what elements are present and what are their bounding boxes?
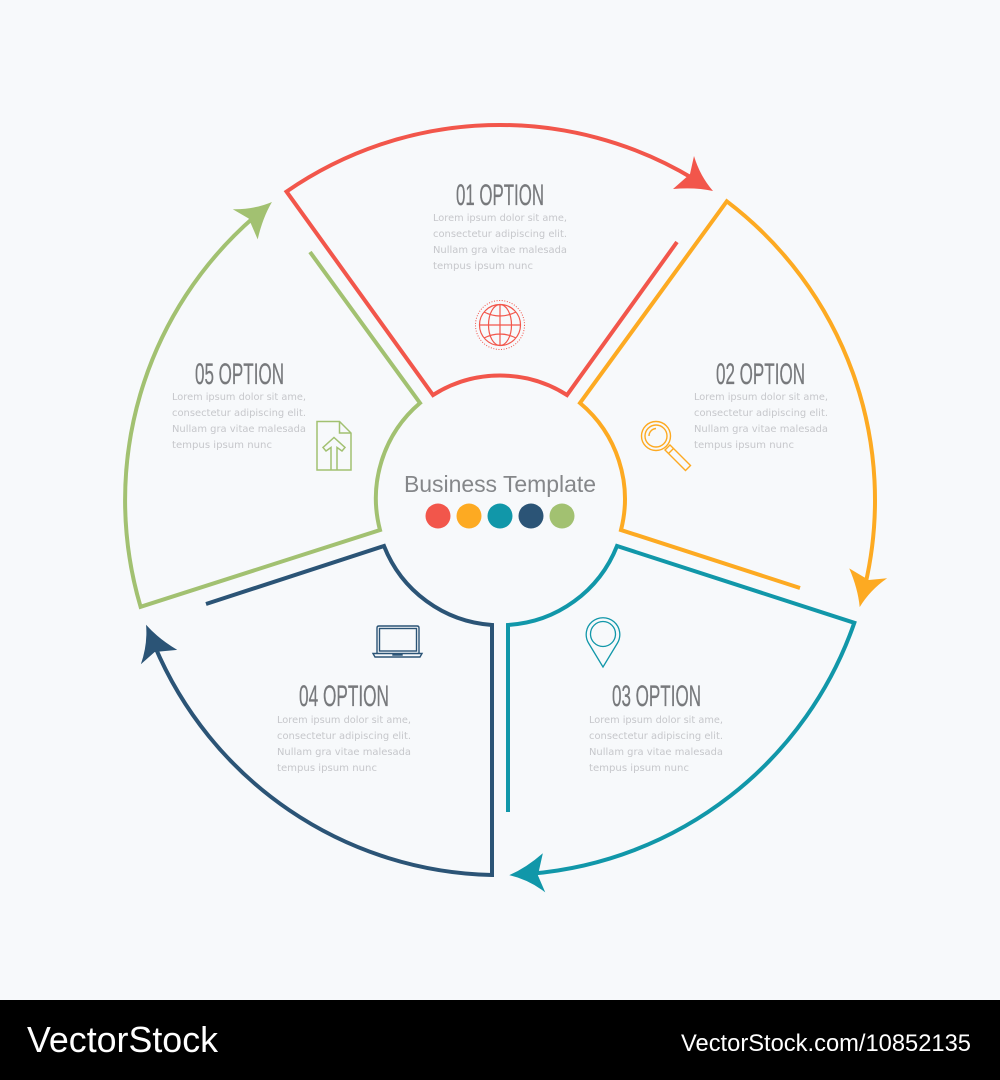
text block: 03 option — [589, 680, 723, 774]
footer bar: VectorStock — [27, 1019, 219, 1060]
panel: segment 01 outline red — [286, 125, 713, 395]
text block: 02 option: 02 OPTION — [716, 358, 805, 391]
text block: 03 option: 03 OPTION — [612, 680, 701, 713]
arrow: navy — [125, 625, 178, 677]
text block: 01 option: Nullam gra vitae malesada — [433, 245, 567, 256]
text block: 04 option: tempus ipsum nunc — [277, 763, 377, 774]
text block: 03 option: tempus ipsum nunc — [589, 763, 689, 774]
arrow: red — [673, 156, 713, 191]
text block: 05 option: Nullam gra vitae malesada — [172, 424, 306, 435]
icon: magnifier — [642, 422, 690, 470]
text block: 03 option: Nullam gra vitae malesada — [589, 747, 723, 758]
panel: segment 05 outline green — [125, 191, 420, 607]
text block: 01 option: tempus ipsum nunc — [433, 261, 533, 272]
text block: 05 option: tempus ipsum nunc — [172, 440, 272, 451]
text block: 05 option: Lorem ipsum dolor sit ame, — [172, 392, 306, 403]
panel: segment 04 outline navy — [125, 546, 492, 875]
color dots legend — [426, 504, 574, 528]
text block: 01 option: 01 OPTION — [456, 179, 544, 212]
text block: 04 option: 04 OPTION — [299, 680, 389, 713]
text block: 02 option: Lorem ipsum dolor sit ame, — [694, 392, 828, 403]
text block: 04 option — [277, 680, 411, 774]
text block: 01 option: consectetur adipiscing elit. — [433, 229, 567, 240]
text block: 03 option: Lorem ipsum dolor sit ame, — [589, 715, 723, 726]
text block: 04 option: Nullam gra vitae malesada — [277, 747, 411, 758]
text block: 03 option: consectetur adipiscing elit. — [589, 731, 723, 742]
text block: 05 option: 05 OPTION — [195, 358, 284, 391]
footer bar — [0, 1000, 1000, 1080]
footer bar: VectorStock.com/10852135 — [681, 1030, 971, 1057]
text block: 04 option: Lorem ipsum dolor sit ame, — [277, 715, 411, 726]
arrow: orange — [847, 558, 893, 607]
center title: Business Template — [404, 471, 596, 497]
icon: laptop — [373, 626, 422, 657]
text block: 05 option — [172, 358, 306, 451]
panel: segment 02 outline orange — [580, 201, 893, 607]
text block: 02 option — [694, 358, 828, 451]
panel: segment 03 outline teal — [508, 546, 854, 904]
arrow: teal — [509, 852, 562, 904]
icon: map pin — [586, 618, 620, 667]
text block: 02 option: Nullam gra vitae malesada — [694, 424, 828, 435]
icon: globe — [476, 300, 524, 350]
text block: 01 option: Lorem ipsum dolor sit ame, — [433, 213, 567, 224]
text block: 02 option: tempus ipsum nunc — [694, 440, 794, 451]
text block: 05 option: consectetur adipiscing elit. — [172, 408, 306, 419]
text block: 01 option — [433, 179, 567, 272]
text block: 04 option: consectetur adipiscing elit. — [277, 731, 411, 742]
text block: 02 option: consectetur adipiscing elit. — [694, 408, 828, 419]
arrow: green — [226, 191, 272, 240]
icon: document upload — [317, 422, 351, 470]
